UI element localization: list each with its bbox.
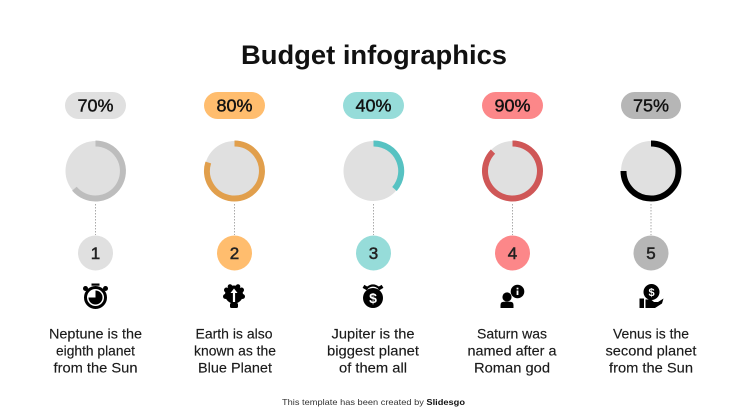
description 3: biggest planet xyxy=(327,342,419,358)
number badge 2 xyxy=(217,236,252,270)
column 3: Jupiter xyxy=(327,92,419,376)
donut 75% xyxy=(621,141,681,201)
percentage pill 80% xyxy=(204,92,265,119)
description 5 xyxy=(606,326,697,376)
description 2: Earth is also xyxy=(196,326,273,342)
description 5: Venus is the xyxy=(613,326,689,342)
number badge 1: 1 xyxy=(91,244,100,263)
number badge 3: 3 xyxy=(369,244,378,263)
percentage pill 40%: 40% xyxy=(356,96,392,116)
number badge 2: 2 xyxy=(230,244,239,263)
number badge 5: 5 xyxy=(646,244,656,263)
column 1: Neptune xyxy=(49,92,142,376)
footer credit: This template has been created by Slidesgo xyxy=(282,397,465,407)
column 5: Venus xyxy=(606,92,697,376)
description 5: from the Sun xyxy=(609,360,693,376)
donut 70% xyxy=(66,141,126,201)
description 3 xyxy=(327,326,419,376)
percentage pill 90%: 90% xyxy=(494,96,530,116)
icon: person with info bubble xyxy=(500,285,524,308)
donut 80% xyxy=(204,141,264,201)
donut 40% xyxy=(344,141,404,201)
description 2: known as the xyxy=(194,342,276,358)
title: Budget infographics xyxy=(241,40,507,70)
description 1: from the Sun xyxy=(54,360,138,376)
icon: money bag stopwatch xyxy=(363,285,383,308)
percentage pill 80%: 80% xyxy=(216,96,252,116)
number badge 3 xyxy=(356,236,391,270)
icon: light bulb gear with arrow xyxy=(223,284,245,308)
percentage pill 70%: 70% xyxy=(78,96,114,116)
icon: stopwatch xyxy=(83,284,108,308)
description 3: Jupiter is the xyxy=(332,326,415,342)
icon: hand holding coin xyxy=(640,284,664,308)
description 4 xyxy=(468,326,557,376)
number badge 5 xyxy=(634,236,668,270)
description 5: second planet xyxy=(606,342,697,358)
column 4: Saturn xyxy=(468,92,557,376)
percentage pill 90% xyxy=(482,92,543,119)
number badge 1 xyxy=(78,236,113,270)
description 1: Neptune is the xyxy=(49,326,142,342)
description 2: Blue Planet xyxy=(198,360,272,376)
description 2 xyxy=(194,326,276,376)
description 1 xyxy=(49,326,142,376)
number badge 4: 4 xyxy=(508,244,517,263)
percentage pill 40% xyxy=(343,92,404,119)
percentage pill 75%: 75% xyxy=(633,96,669,116)
description 3: of them all xyxy=(339,360,407,376)
icon: money bag stopwatch: $ xyxy=(369,290,377,306)
description 4: Roman god xyxy=(474,360,550,376)
donut 90% xyxy=(482,141,542,201)
icon: hand holding coin: $ xyxy=(648,287,655,299)
description 4: Saturn was xyxy=(477,326,547,342)
description 4: named after a xyxy=(468,342,557,358)
number badge 4 xyxy=(495,236,530,270)
percentage pill 75% xyxy=(621,92,681,119)
description 1: eighth planet xyxy=(56,342,135,358)
column 2: Earth xyxy=(194,92,276,376)
percentage pill 70% xyxy=(65,92,126,119)
